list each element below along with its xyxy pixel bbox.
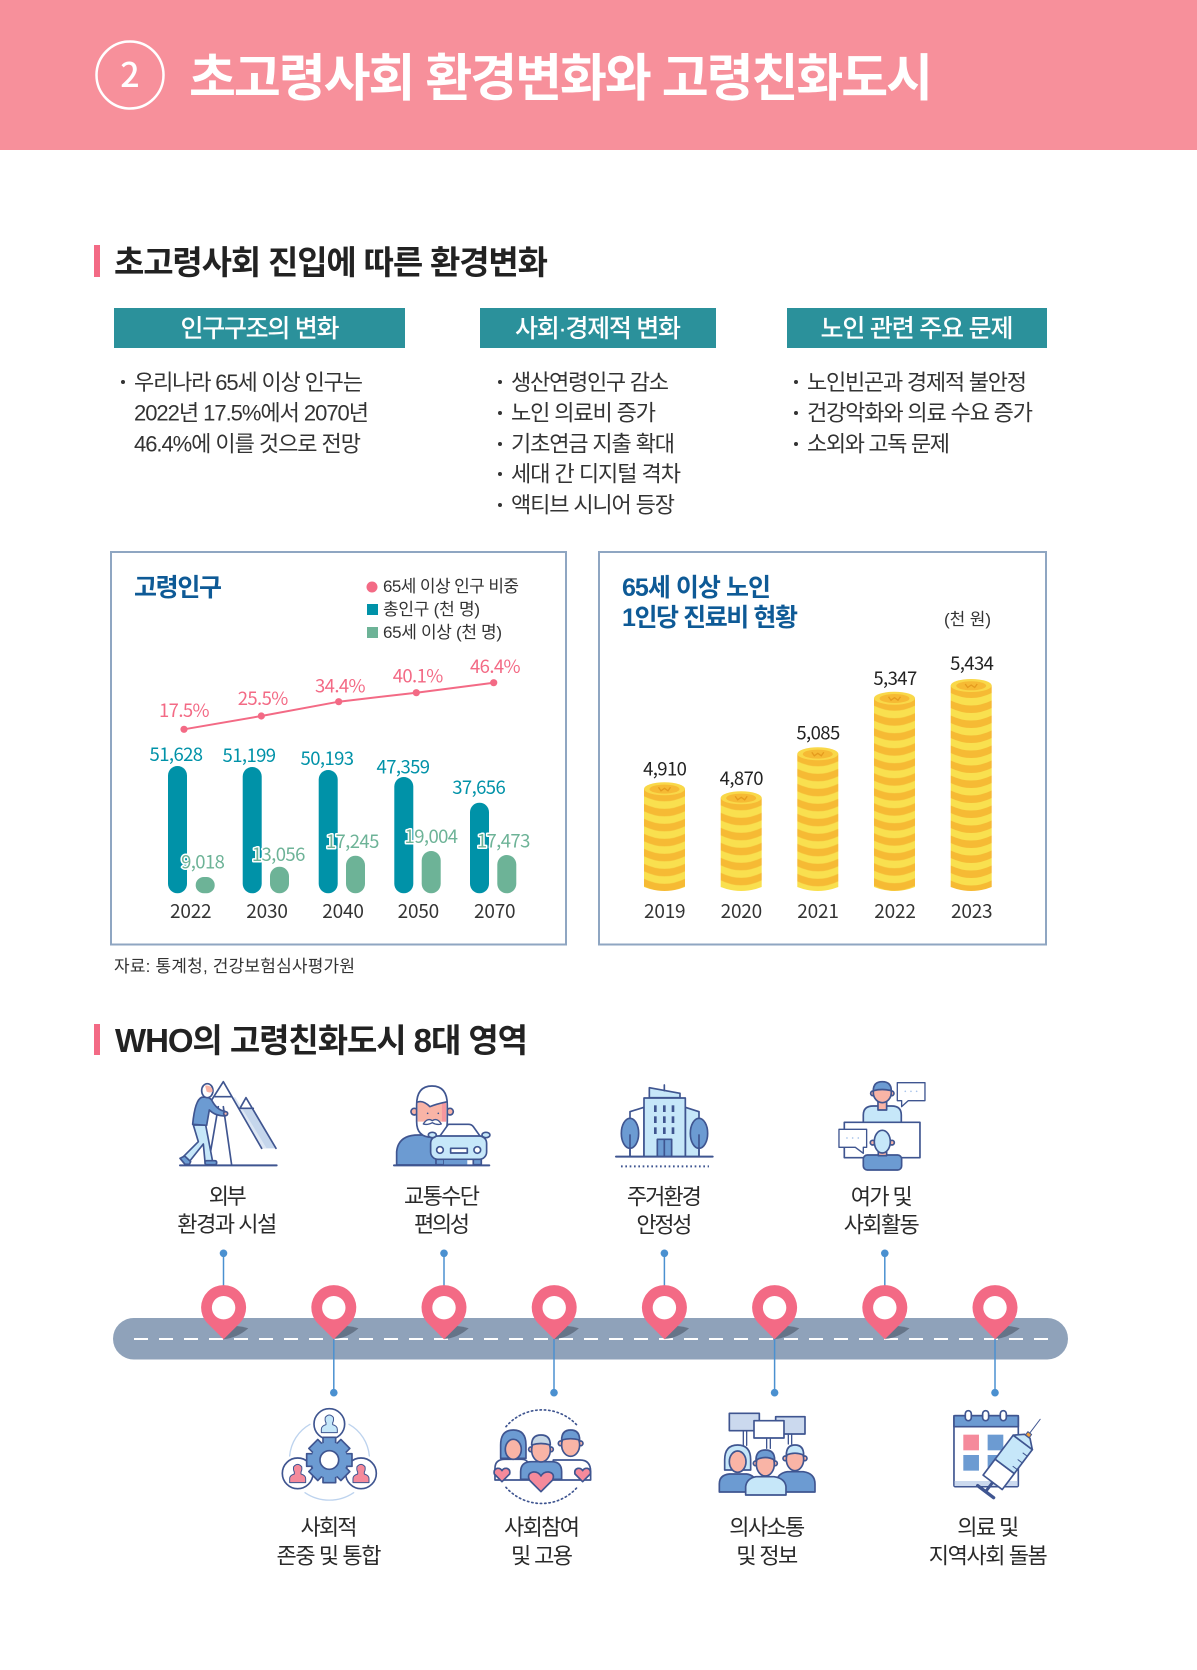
line chart: share of 65+: 46.4% [470, 653, 521, 679]
legend: 65세 이상 (천 명) [383, 623, 502, 642]
chapter number badge [96, 42, 164, 108]
column list [498, 370, 681, 518]
label: health and community care [929, 1515, 1048, 1568]
column list: 노인빈곤과 경제적 불안정 [807, 370, 1027, 395]
section heading: WHO age-friendly city: WHO의 고령친화도시 8대 영역 [115, 1022, 528, 1059]
column list: 생산연령인구 감소 [511, 370, 669, 395]
column heading: 노인 관련 주요 문제 [820, 315, 1014, 343]
pin 5 [642, 1285, 689, 1339]
icon: people with hearts [494, 1410, 591, 1503]
column list [794, 370, 1033, 456]
label: transportation: 교통수단 [404, 1184, 480, 1209]
icon: leisure and social activities [839, 1082, 925, 1170]
icon: people with signs [719, 1413, 815, 1495]
column list: 소외와 고독 문제 [807, 432, 950, 456]
x axis years: 2021 [797, 897, 839, 924]
x axis years [170, 897, 515, 924]
column text: 46.4%에 이를 것으로 전망 [134, 432, 361, 456]
coin stack 2021 [797, 747, 838, 891]
label: respect and inclusion: 존중 및 통합 [276, 1544, 382, 1568]
bar chart: total and 65+ population: 51,199 [223, 742, 276, 768]
label: communication and information: 의사소통 [729, 1515, 805, 1540]
legend: 65세 이상 인구 비중 [383, 577, 519, 596]
label: participation and employment [504, 1515, 580, 1568]
line chart: share of 65+: 25.5% [238, 685, 288, 711]
x axis years: 2023 [951, 897, 992, 924]
label: transportation [404, 1184, 480, 1237]
coin stack 2020 [721, 791, 762, 891]
icon: hiker and mountain [180, 1082, 277, 1165]
label: housing: 주거환경 [627, 1184, 702, 1210]
coin stack chart [643, 650, 994, 891]
source note: 자료: 통계청, 건강보험심사평가원 [114, 957, 355, 976]
label: leisure and social: 사회활동 [844, 1212, 920, 1237]
label: communication and information: 및 정보 [736, 1544, 798, 1568]
legend [366, 577, 519, 642]
road [113, 1318, 1068, 1360]
legend: 총인구 (천 명) [383, 600, 480, 619]
column list: 건강악화와 의료 수요 증가 [807, 400, 1033, 426]
line chart: share of 65+: 17.5% [159, 697, 210, 723]
unit label: (천 원) [944, 610, 991, 629]
column heading: 사회·경제적 변화 [515, 315, 681, 343]
coin stack 2022 [874, 692, 915, 891]
icon: calendar and syringe [954, 1411, 1050, 1499]
column list: 노인 의료비 증가 [511, 400, 656, 426]
bar chart: total and 65+ population: 19,004 [405, 823, 458, 849]
column text: 우리나라 65세 이상 인구는 [134, 370, 363, 395]
label: transportation: 편의성 [414, 1212, 470, 1237]
bar chart: total and 65+ population: 51,628 [150, 741, 203, 767]
column list: 액티브 시니어 등장 [511, 492, 675, 518]
bar chart: total and 65+ population: 17,245 [326, 828, 379, 854]
chapter number badge: 2 [120, 48, 140, 97]
label: housing: 안정성 [636, 1212, 692, 1237]
panel: elderly population [111, 552, 566, 944]
column: population structure [114, 308, 405, 456]
label: participation and employment: 사회참여 [504, 1515, 580, 1540]
column list: 기초연금 지출 확대 [511, 432, 675, 456]
map pins [201, 1285, 1020, 1339]
coin stack 2019 [644, 782, 685, 891]
x axis years: 2022 [170, 897, 211, 924]
label: outdoor spaces: 외부 [209, 1184, 247, 1209]
main title: 초고령사회 환경변화와 고령친화도시 [189, 50, 933, 107]
x axis years: 2030 [246, 897, 288, 924]
bar chart: total and 65+ population: 47,359 [377, 754, 430, 780]
coin stack chart: 5,347 [873, 665, 917, 691]
pin 7 [862, 1285, 910, 1339]
bar chart: total and 65+ population: 17,473 [477, 828, 530, 854]
column list: 세대 간 디지털 격차 [511, 462, 681, 486]
panel title: 65세 이상 노인 [622, 574, 771, 602]
coin stack 2023 [951, 679, 992, 891]
panel title: 1인당 진료비 현황 [622, 604, 798, 632]
line chart: share of 65+: 34.4% [315, 672, 366, 698]
x axis years: 2050 [398, 897, 439, 924]
pin 8 [972, 1285, 1020, 1339]
header banner [0, 0, 1197, 150]
column text: 2022년 17.5%에서 2070년 [134, 400, 369, 426]
coin stack chart: 4,910 [643, 756, 687, 782]
icon: gear and people [282, 1409, 376, 1500]
bar chart: total and 65+ population: 37,656 [452, 774, 505, 800]
line chart: share of 65+ [159, 653, 521, 733]
pin 1 [201, 1285, 248, 1339]
pin 4 [532, 1285, 579, 1339]
label: health and community care: 의료 및 [957, 1515, 1019, 1540]
label: outdoor spaces [177, 1184, 277, 1237]
icon: elderly man and car [394, 1086, 490, 1165]
bar chart: total and 65+ population: 50,193 [301, 745, 354, 771]
column text [121, 370, 369, 456]
x axis years: 2019 [644, 897, 685, 924]
pin 6 [752, 1285, 799, 1339]
bar chart: total and 65+ population: 13,056 [252, 841, 305, 867]
bar chart: total and 65+ population: 9,018 [181, 848, 225, 874]
label: participation and employment: 및 고용 [511, 1544, 573, 1568]
x axis years: 2070 [474, 897, 515, 924]
coin stack chart: 4,870 [720, 765, 763, 791]
bar chart: total and 65+ population [150, 741, 530, 893]
panel title [622, 574, 798, 632]
coin stack chart: 5,434 [950, 650, 994, 676]
label: outdoor spaces: 환경과 시설 [177, 1212, 277, 1237]
icon: housing buildings [616, 1085, 713, 1166]
section heading: environment change: 초고령사회 진입에 따른 환경변화 [114, 244, 548, 281]
pin 3 [422, 1285, 469, 1339]
x axis years: 2040 [322, 897, 364, 924]
label: housing [627, 1184, 702, 1237]
panel: medical cost per elderly [599, 552, 1046, 944]
column: elderly issues [787, 308, 1047, 456]
label: communication and information [729, 1515, 805, 1568]
label: leisure and social: 여가 및 [851, 1184, 913, 1210]
x axis years [644, 897, 992, 924]
panel title: 고령인구 [134, 574, 222, 602]
label: respect and inclusion: 사회적 [300, 1515, 358, 1540]
coin stack chart: 5,085 [796, 720, 840, 746]
column heading: 인구구조의 변화 [180, 315, 340, 343]
line chart: share of 65+: 40.1% [393, 662, 443, 688]
label: leisure and social [844, 1184, 920, 1237]
pin 2 [311, 1285, 358, 1339]
x axis years: 2022 [874, 897, 916, 924]
connector lines [220, 1250, 999, 1396]
column: socio-economic change [480, 308, 716, 518]
x axis years: 2020 [721, 897, 762, 924]
label: health and community care: 지역사회 돌봄 [929, 1544, 1048, 1568]
label: respect and inclusion [276, 1515, 382, 1568]
